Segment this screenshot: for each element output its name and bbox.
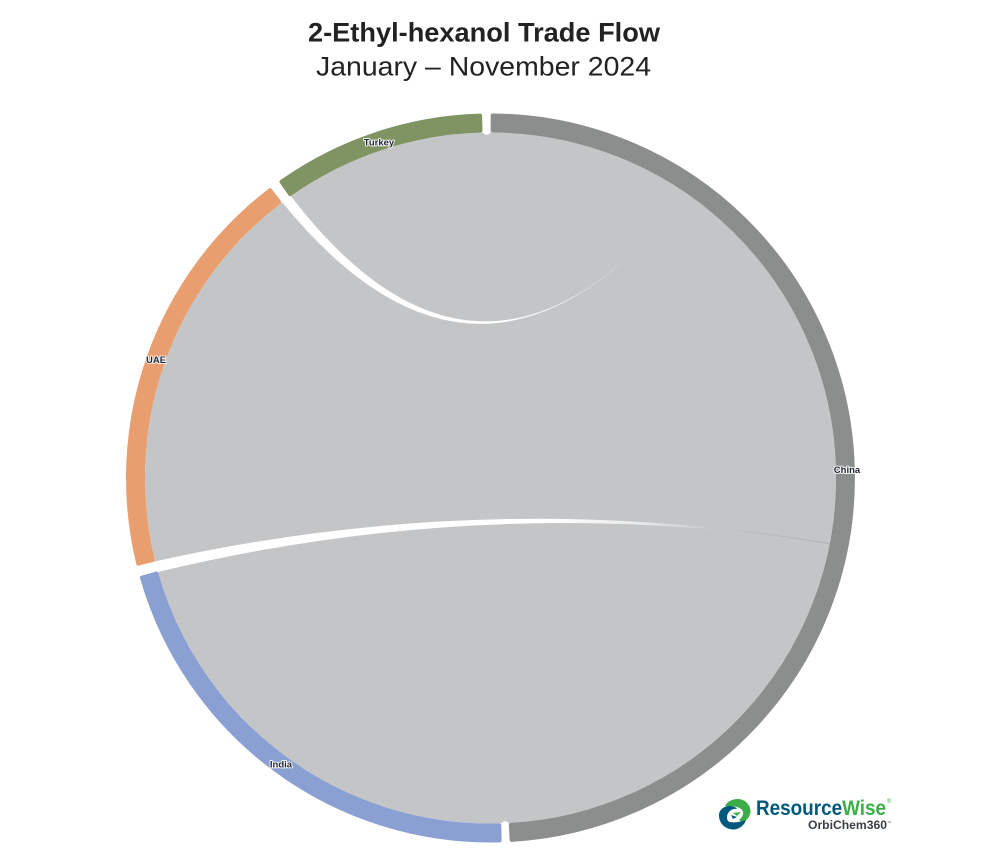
ribbons: trade flows: [145, 132, 836, 824]
arc: Turkey: [282, 116, 480, 194]
title: [308, 18, 661, 82]
trademark: ™: [887, 820, 891, 825]
logo: ResourceWise OrbiChem360: [719, 797, 892, 832]
label: Turkey: Turkey: [364, 138, 395, 148]
label: China: China: [834, 465, 861, 476]
notch: top: [482, 105, 491, 135]
faint flow line into China: [155, 519, 832, 562]
label: India: India: [270, 760, 293, 770]
icon: swirl mark: [719, 799, 751, 830]
label: UAE: UAE: [146, 355, 166, 366]
wordmark: ResourceWise: [756, 797, 886, 820]
gap: UAE and India ribbons: [135, 519, 832, 577]
chord diagram: [128, 105, 861, 850]
arc: China: [493, 116, 853, 840]
title: 2-Ethyl-hexanol Trade Flow: [308, 18, 661, 48]
arc: India: [142, 574, 500, 840]
notch: bottom: [501, 821, 509, 850]
product name: OrbiChem360: [808, 820, 887, 832]
arc: UAE: [128, 190, 279, 564]
gap: Turkey and UAE ribbons: [272, 190, 687, 324]
title: January – November 2024: [316, 52, 651, 82]
registered mark: ®: [887, 798, 892, 805]
